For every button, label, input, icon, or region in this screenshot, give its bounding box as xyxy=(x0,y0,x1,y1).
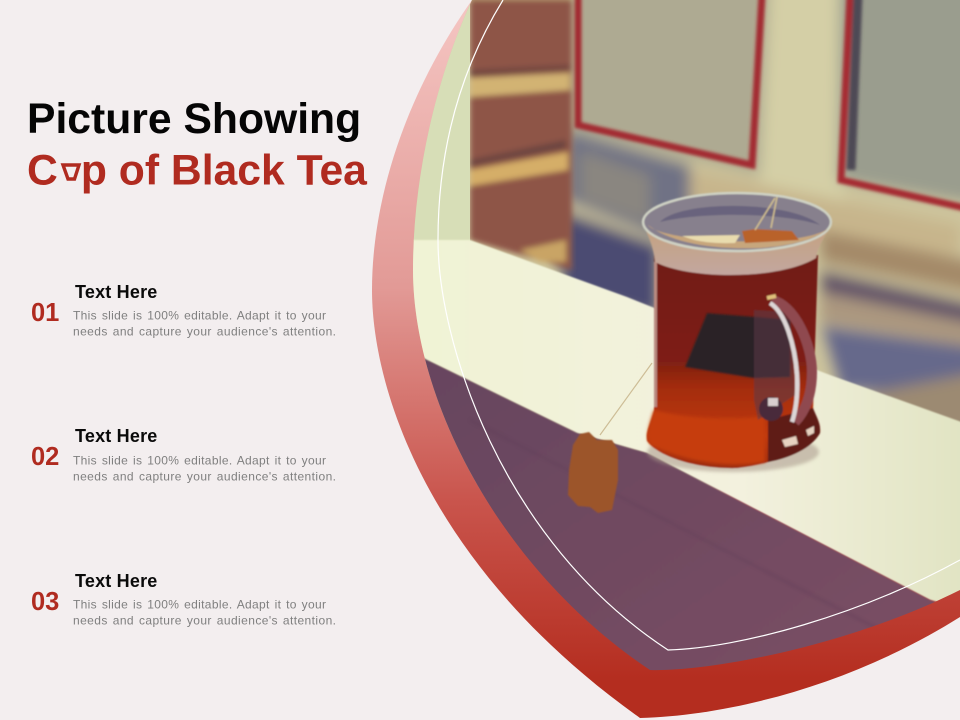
window frames xyxy=(578,0,960,208)
title line 2: Cup of Black Tea xyxy=(27,146,367,194)
mug handle xyxy=(767,296,812,422)
item description: needs and capture your audience's attention. xyxy=(73,614,336,628)
title line 1: Picture Showing xyxy=(27,95,361,143)
tea body xyxy=(647,255,820,468)
photo: cup of black tea on a window sill xyxy=(400,0,960,720)
item description: needs and capture your audience's attention. xyxy=(73,324,336,338)
handle glass area xyxy=(754,310,795,420)
item description xyxy=(73,598,336,628)
item description: This slide is 100% editable. Adapt it to your xyxy=(73,454,326,468)
item heading: Text Here xyxy=(75,426,158,446)
brick wall xyxy=(470,0,572,270)
glass left edge highlight xyxy=(654,262,657,407)
glass mug xyxy=(642,193,833,472)
mug rim interior xyxy=(643,193,831,251)
bright tea base xyxy=(648,410,765,465)
mug base right xyxy=(768,408,820,462)
item description: This slide is 100% editable. Adapt it to your xyxy=(73,308,326,322)
dark reflection in tea xyxy=(685,313,790,378)
list item 01 xyxy=(31,282,336,338)
handle lower joint xyxy=(759,397,783,421)
item description xyxy=(73,454,336,484)
tea bag in mug xyxy=(742,229,799,243)
glass upper frosted band xyxy=(646,232,825,276)
number 03: 03 xyxy=(31,588,59,616)
list item 02 xyxy=(31,426,336,484)
item heading: Text Here xyxy=(75,571,158,591)
mug shadow xyxy=(646,444,820,474)
number 01: 01 xyxy=(31,299,59,327)
number 02: 02 xyxy=(31,443,59,471)
white outline curve xyxy=(438,0,960,650)
photo background wall xyxy=(400,0,960,490)
list item 03 xyxy=(31,571,336,628)
tea surface highlight xyxy=(682,235,740,243)
tea bag strings xyxy=(755,197,777,230)
tag string xyxy=(600,363,652,435)
item heading: Text Here xyxy=(75,282,158,302)
item description: This slide is 100% editable. Adapt it to your xyxy=(73,598,326,612)
left window jamb xyxy=(414,4,470,241)
title xyxy=(27,95,367,194)
sill front face xyxy=(424,358,936,670)
window sill xyxy=(400,240,960,610)
hanging tea bag tag xyxy=(568,432,618,513)
icon: cup replacing the letter u xyxy=(63,165,79,179)
item description xyxy=(73,308,336,338)
decorative curved gradient shape xyxy=(372,0,960,718)
item description: needs and capture your audience's attention. xyxy=(73,470,336,484)
